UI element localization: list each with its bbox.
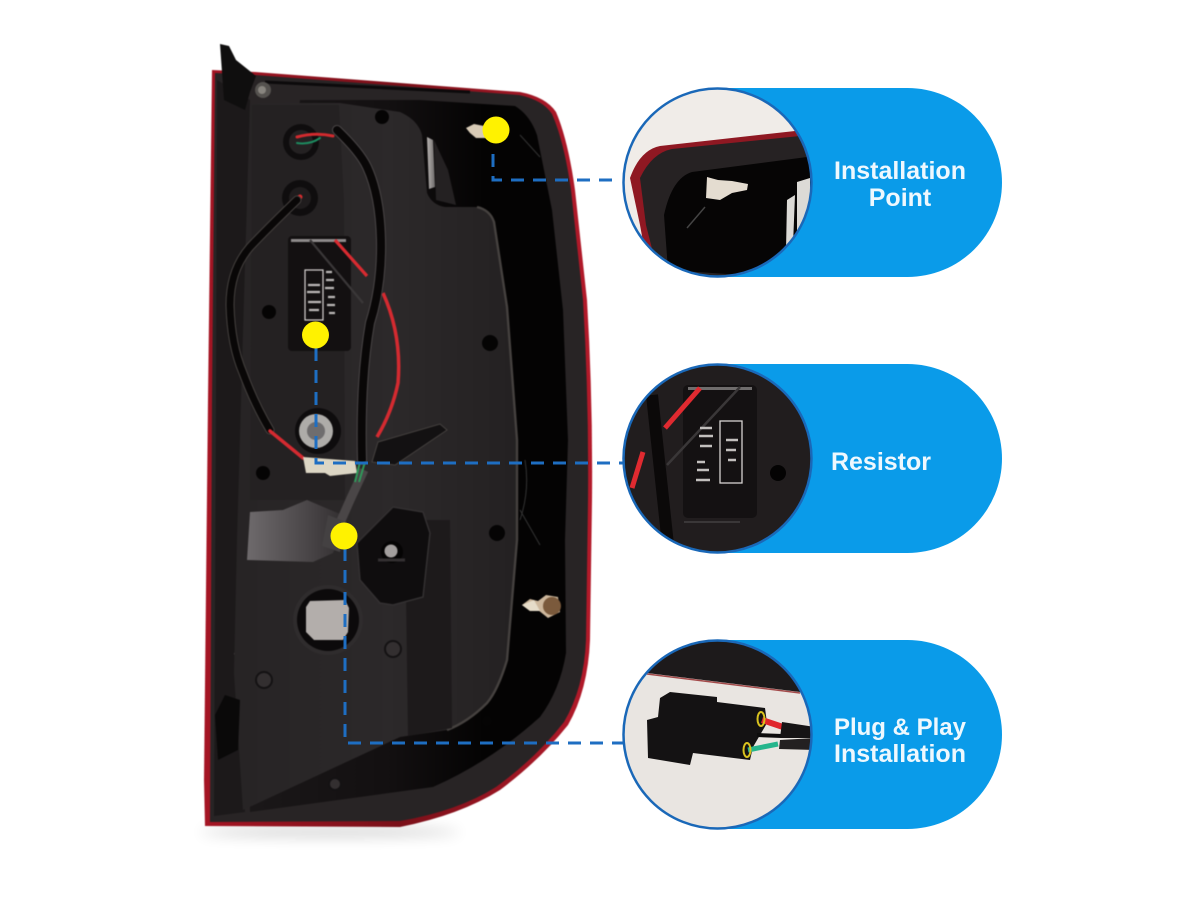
dashed leader: resistor	[316, 348, 626, 463]
tail light photo	[200, 44, 592, 836]
top edge groove	[265, 82, 470, 92]
detail photo: stud in housing	[624, 90, 810, 276]
label: Installation	[834, 740, 966, 768]
marker dot: plug and play	[330, 522, 358, 550]
panel edge highlight	[447, 207, 517, 730]
plug body	[322, 515, 346, 552]
left frame highlight	[235, 497, 245, 692]
photo ring	[624, 88, 812, 276]
white connector	[303, 457, 357, 476]
brass mounting stud lower	[522, 595, 561, 618]
label: Point	[869, 184, 932, 212]
detail photo: wiring connector	[624, 642, 810, 828]
pill background	[624, 88, 1002, 277]
top bolt	[255, 82, 271, 98]
photo ring	[624, 640, 812, 828]
left raised panel	[250, 105, 345, 500]
dark housing	[210, 73, 588, 822]
mounting tab	[220, 44, 256, 110]
scratches in cavity	[520, 135, 540, 545]
rubber grommets	[282, 124, 319, 216]
wires from grommets	[230, 130, 381, 460]
bracket wing	[372, 424, 447, 465]
brass mounting stud upper	[466, 124, 486, 138]
label: Resistor	[831, 448, 931, 476]
dark grey inner wall	[434, 140, 456, 205]
small moulded screws	[256, 641, 401, 790]
black inner cavity	[240, 100, 568, 812]
inner back panel	[234, 103, 517, 810]
marker dot: installation point	[482, 116, 510, 144]
wire harness	[339, 470, 364, 525]
connector bracket	[357, 507, 430, 605]
red outer lens rim	[204, 70, 592, 827]
darker centre panel step	[405, 520, 452, 736]
thin red wire from resistor	[377, 293, 399, 437]
callout: plug and play	[620, 636, 1002, 832]
coloured wire leads	[355, 462, 365, 482]
photo ring	[624, 364, 812, 552]
callout: installation point	[620, 85, 1002, 280]
panel holes	[256, 110, 505, 726]
round port with square window	[293, 585, 363, 655]
pill background	[624, 640, 1002, 829]
infographic canvas	[203, 43, 1002, 842]
white reflector behind panel	[427, 137, 435, 189]
dashed leader: plug and play	[345, 548, 628, 743]
label: Installation	[834, 157, 966, 185]
pill background	[624, 364, 1002, 553]
marker dot: resistor	[302, 322, 329, 348]
left frame strip	[214, 80, 250, 816]
callout: resistor	[620, 360, 1002, 555]
ground shadow	[200, 828, 460, 836]
detail photo: resistor box	[624, 366, 810, 552]
bulb socket	[295, 408, 341, 454]
dashed leader: installation point	[493, 148, 614, 180]
grey patch	[247, 500, 347, 562]
lower left clip	[215, 695, 240, 760]
resistor box	[288, 236, 367, 351]
label: Plug & Play	[834, 714, 967, 741]
